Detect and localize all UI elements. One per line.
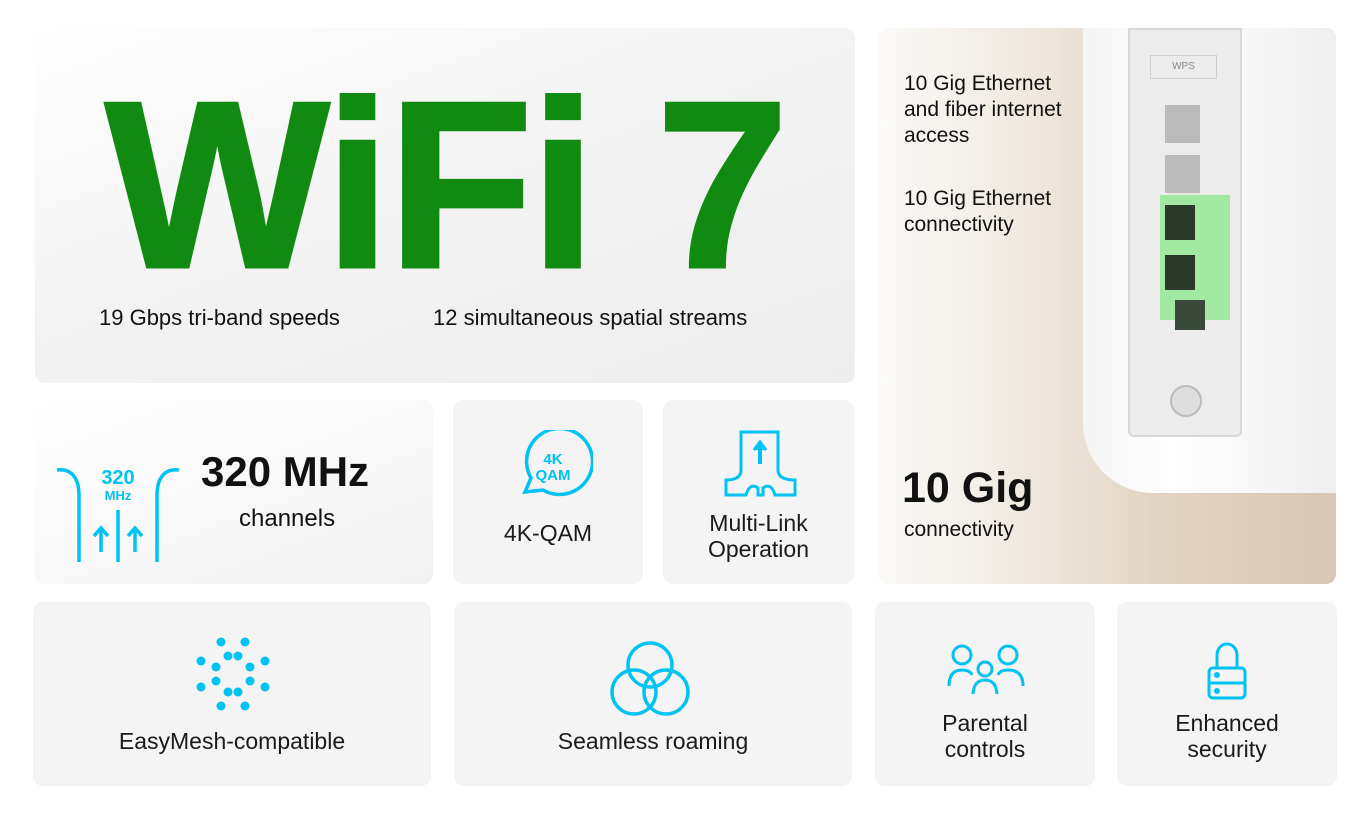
title: WiFi 7: WiFi 7 <box>105 53 786 318</box>
text: 10 Gig Ethernet connectivity: 10 Gig Ethernet <box>904 187 1051 210</box>
label <box>1175 710 1279 762</box>
icon: multi-link <box>724 430 796 496</box>
label <box>708 510 809 562</box>
panel: router photo <box>878 28 1336 584</box>
icon: lock <box>1208 642 1246 700</box>
panel: 320 MHz <box>35 400 433 584</box>
icon: mesh dots <box>196 638 270 710</box>
router body <box>1083 8 1370 493</box>
label: Enhanced <box>1175 710 1279 736</box>
icon: 4K QAM bubble <box>522 430 593 496</box>
label: EasyMesh-compatible <box>119 728 345 754</box>
label <box>942 710 1028 762</box>
panel: WiFi 7 hero <box>35 28 855 383</box>
text: 10 Gig Ethernet fiber: and fiber internet <box>904 98 1062 121</box>
panel: Parental controls <box>875 602 1095 786</box>
label: Seamless roaming <box>558 728 748 754</box>
text: 10 Gig Ethernet fiber: 10 Gig Ethernet <box>904 72 1051 95</box>
text: 12 streams: 12 simultaneous spatial streams <box>433 305 747 330</box>
label: 4K-QAM <box>504 520 592 546</box>
panel: Enhanced security <box>1117 602 1337 786</box>
text: connectivity: connectivity <box>904 518 1014 541</box>
text: 320 MHz: 320 MHz <box>201 448 369 495</box>
port panel: WPS <box>1172 61 1195 72</box>
icon: 4K QAM bubble: QAM <box>536 467 570 484</box>
icon: venn circles <box>610 641 690 716</box>
panel: EasyMesh <box>33 602 431 786</box>
icon: 4K QAM bubble: 4K <box>543 451 563 468</box>
text: 10 Gig Ethernet connectivity: connectivity <box>904 213 1014 236</box>
icon: 320 MHz channels: MHz <box>105 488 132 503</box>
label: Multi-Link <box>709 510 808 536</box>
label: Operation <box>708 536 809 562</box>
panel: Multi-Link Operation <box>663 400 854 584</box>
icon: 320 MHz channels <box>56 467 180 562</box>
icon: family <box>948 644 1024 694</box>
text: 10 Gig Ethernet fiber: access <box>904 124 969 147</box>
panel: Seamless roaming <box>454 602 852 786</box>
panel: 4K-QAM <box>453 400 643 584</box>
label: Parental <box>942 710 1028 736</box>
text: 19 Gbps: 19 Gbps tri-band speeds <box>99 305 340 330</box>
icon: 320 MHz channels: 320 <box>101 467 135 489</box>
port panel <box>1128 28 1242 437</box>
text: 10 Gig Ethernet connectivity <box>904 187 1051 236</box>
label: controls <box>945 736 1025 762</box>
text: channels: channels <box>239 505 335 532</box>
label: security <box>1187 736 1267 762</box>
text: 10 Gig: 10 Gig <box>902 464 1033 512</box>
text: 10 Gig Ethernet fiber <box>904 72 1062 147</box>
